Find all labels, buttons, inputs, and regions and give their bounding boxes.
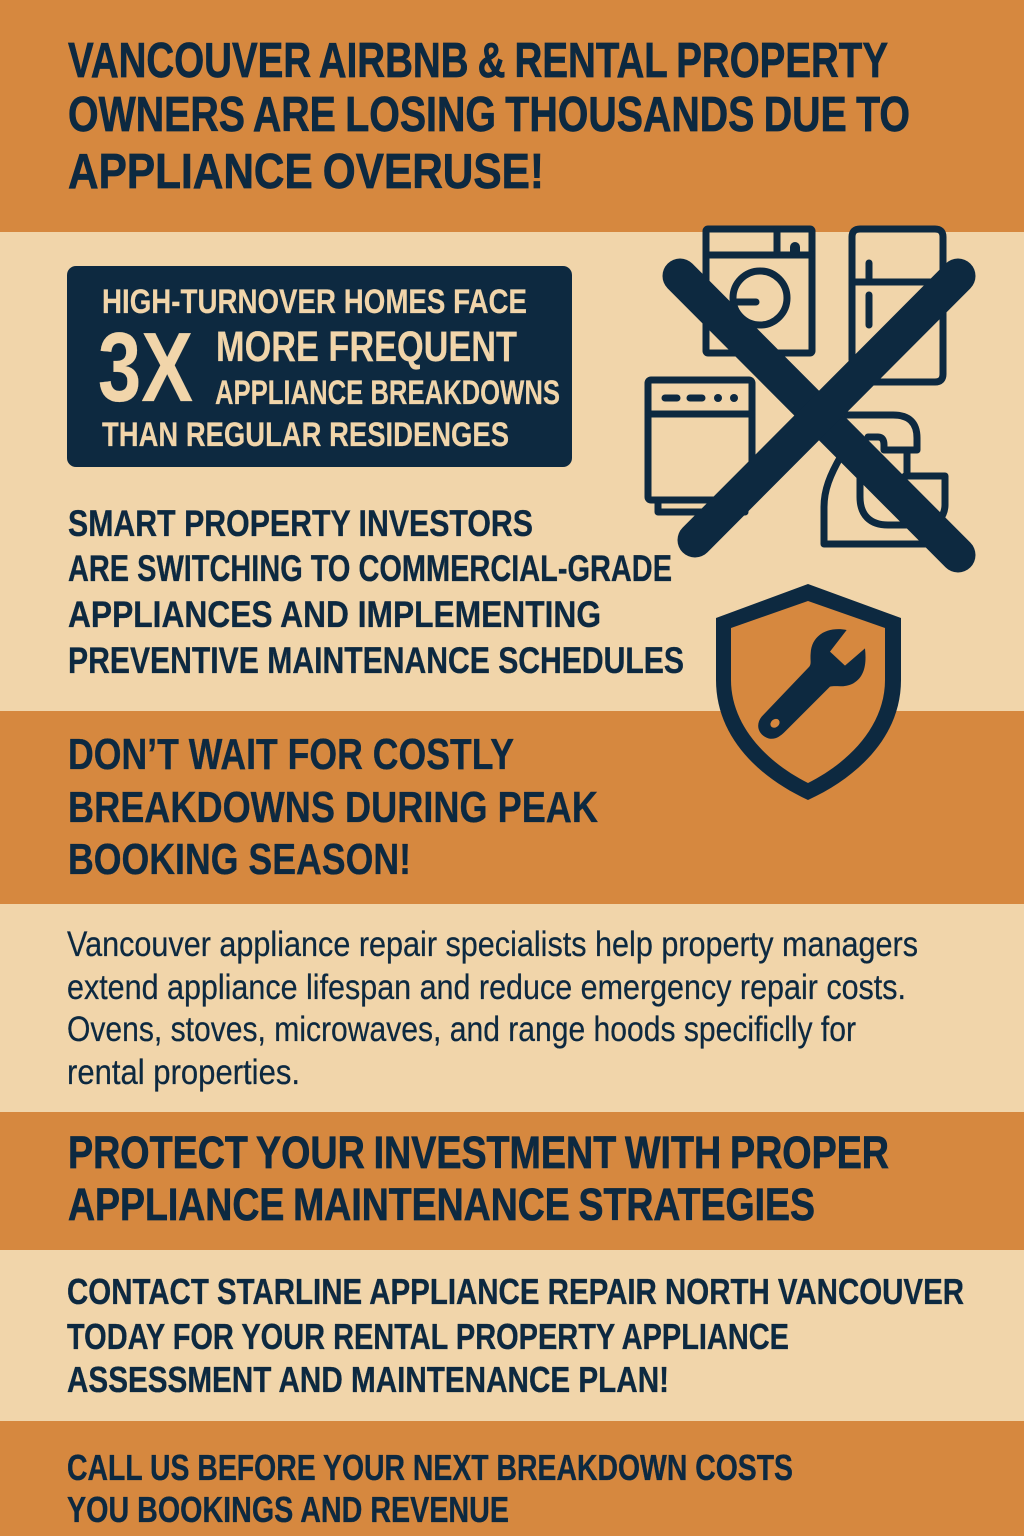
icon: shield with wrench	[716, 584, 901, 800]
icon: crossed-out appliances	[648, 229, 958, 555]
title	[68, 34, 910, 199]
text: contact Starline: TODAY FOR YOUR RENTAL PROPERTY APPLIANCE	[67, 1316, 789, 1357]
text: contact Starline: ASSESSMENT AND MAINTENANCE PLAN!	[67, 1359, 669, 1400]
heading: don't wait: BOOKING SEASON!	[68, 835, 411, 884]
heading: don't wait	[68, 730, 598, 884]
text: smart property investors: SMART PROPERTY INVESTORS	[68, 503, 533, 544]
band: title	[0, 0, 1024, 232]
callout: 3X more frequent breakdowns: MORE FREQUENT	[216, 323, 517, 371]
text: smart property investors: PREVENTIVE MAINTENANCE SCHEDULES	[68, 640, 684, 681]
heading: protect your investment: APPLIANCE MAINTENANCE STRATEGIES	[68, 1179, 815, 1230]
text: repair specialists description: Ovens, stoves, microwaves, and range hoods specificlly for	[67, 1010, 856, 1049]
icon: refrigerator	[852, 229, 943, 382]
callout: 3X more frequent breakdowns: THAN REGULAR RESIDENGES	[102, 416, 509, 454]
text: repair specialists description: extend appliance lifespan and reduce emergency repair costs.	[67, 968, 906, 1007]
heading: don't wait: BREAKDOWNS DURING PEAK	[68, 783, 598, 832]
callout: 3X more frequent breakdowns: 3X	[98, 312, 193, 422]
heading: protect your investment	[68, 1127, 889, 1230]
heading: don't wait: DON’T WAIT FOR COSTLY	[68, 730, 514, 779]
text: call to action: CALL US BEFORE YOUR NEXT BREAKDOWN COSTS	[67, 1447, 793, 1488]
icon: oven	[648, 380, 752, 512]
text: smart property investors: ARE SWITCHING TO COMMERCIAL-GRADE	[68, 548, 672, 589]
text: repair specialists description	[67, 925, 918, 1092]
text: smart property investors: APPLIANCES AND IMPLEMENTING	[68, 594, 601, 635]
icon: large X	[680, 276, 958, 555]
title: APPLIANCE OVERUSE!	[68, 145, 544, 199]
band: protect	[0, 1112, 1024, 1250]
callout: 3X more frequent breakdowns: APPLIANCE BREAKDOWNS	[215, 374, 560, 412]
callout: 3X more frequent breakdowns	[67, 266, 572, 467]
text: repair specialists description: rental properties.	[67, 1053, 300, 1092]
icon: stand mixer	[824, 415, 945, 544]
callout: 3X more frequent breakdowns: HIGH-TURNOVER HOMES FACE	[102, 283, 527, 321]
heading: protect your investment: PROTECT YOUR INVESTMENT WITH PROPER	[68, 1127, 889, 1178]
band: warning	[0, 711, 1024, 904]
text: repair specialists description: Vancouver appliance repair specialists help property managers	[67, 925, 918, 964]
text: call to action: YOU BOOKINGS AND REVENUE	[67, 1489, 509, 1530]
text: call to action	[67, 1447, 793, 1530]
icon: washing machine	[706, 229, 812, 353]
band: call to action	[0, 1421, 1024, 1536]
text: smart property investors	[68, 503, 684, 681]
text: contact Starline	[67, 1271, 964, 1400]
